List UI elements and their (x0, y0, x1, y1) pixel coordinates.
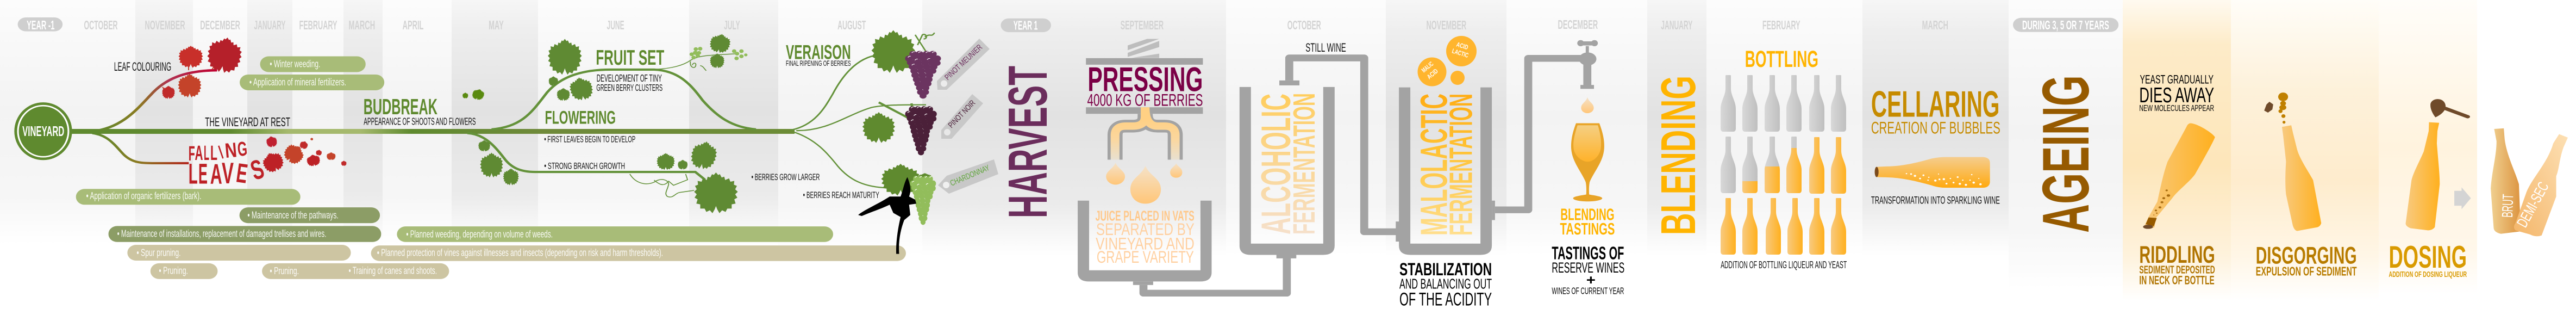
timeline: month labels, August and year 1: AUGUST (837, 18, 866, 32)
text: stabilization (1399, 260, 1492, 310)
panel: budbreak, flowering and fruit set: GREEN BERRY CLUSTERS (596, 83, 662, 94)
task: pruning and training: • Pruning. (270, 266, 299, 277)
timeline: month labels, blending: DECEMBER (1558, 18, 1598, 32)
text: veraison description: FINAL RIPENING OF BERRIES (786, 60, 851, 68)
panel: riddling, disgorging and dosing: SEDIMENT DEPOSITED (2139, 264, 2215, 276)
icon: fruit set vine with tiny berries (690, 33, 747, 68)
row three: full bottles (1721, 198, 1846, 255)
icon: pinot meunier leaf and cluster (872, 30, 941, 98)
panel: malolactic fermentation and blending tastings: WINES OF CURRENT YEAR (1552, 286, 1624, 297)
panel: riddling, disgorging and dosing: NEW MOLECULES APPEAR (2139, 103, 2214, 113)
panel: vineyard autumn: LEAF COLOURING (114, 60, 171, 73)
text: stabilization: OF THE ACIDITY (1399, 289, 1492, 310)
heading: falling leaves: L (204, 142, 209, 165)
text: tastings of reserve wines: RESERVE WINES (1552, 260, 1624, 276)
heading: dosing (2389, 239, 2467, 279)
heading: malolactic fermentation (1413, 94, 1479, 236)
text: THE VINEYARD AT REST (205, 115, 290, 129)
timeline: March and ageing duration: MARCH (1922, 18, 1948, 32)
text: fruit set description (596, 72, 662, 94)
label: still wine: STILL WINE (1305, 41, 1346, 54)
panel: riddling, disgorging and dosing: EXPULSION OF SEDIMENT (2256, 264, 2357, 279)
text: tastings of reserve wines: + (1586, 272, 1596, 287)
task: winter weeding (260, 56, 366, 72)
task: organic fertilizers (76, 189, 301, 205)
timeline: month labels, spring and summer: JUNE (607, 18, 624, 32)
task: winter weeding: • Winter weeding. (270, 58, 320, 70)
icon: brut bottle (2491, 128, 2521, 234)
icon: demi-sec bottle (2514, 134, 2568, 236)
icon: juice pipes (1115, 107, 1176, 159)
heading: disgorging (2256, 242, 2357, 279)
task: pathways: • Maintenance of the pathways. (247, 209, 339, 221)
text: TRANSFORMATION INTO SPARKLING WINE (1871, 194, 2000, 206)
text: 4000 kg of berries: 4000 KG OF BERRIES (1087, 91, 1203, 110)
icon: small bud leaves (462, 88, 486, 101)
icon: wine drop (1581, 97, 1594, 113)
heading: blending tastings (1560, 205, 1615, 238)
task: pruning and training (262, 263, 449, 279)
icon: press plates (1086, 58, 1203, 114)
text: juice placed in vats: SEPARATED BY (1096, 220, 1195, 239)
panel: vineyard autumn (14, 60, 290, 163)
pipe: vat one to vat two (1143, 258, 1287, 293)
icon: falling leaves (260, 135, 347, 175)
bubble: small (1450, 71, 1465, 85)
timeline: month labels, winemaking (1121, 18, 1321, 32)
icon: press screw (1128, 39, 1159, 58)
tag: chardonnay: CHARDONNAY (949, 163, 991, 188)
label: brut: BRUT (2499, 194, 2516, 218)
heading: blending tastings: TASTINGS (1560, 219, 1615, 238)
task: spur pruning (127, 245, 351, 261)
text: JULY (724, 18, 740, 32)
panel: riddling, disgorging and dosing: DOSING (2389, 239, 2467, 274)
timeline: month labels, spring and summer: MAY (489, 18, 504, 32)
task: installations: • Maintenance of installations, replacement of damaged trellises and wires. (117, 228, 326, 239)
vineyard task bars, summer (371, 226, 906, 261)
ageing duration pill (2013, 18, 2118, 32)
icon: red autumn leaves on branch (162, 35, 245, 99)
branch: pinot noir (796, 105, 926, 131)
timeline: month labels, blending: NOVEMBER (1427, 18, 1466, 32)
heading: alcoholic fermentation: FERMENTATION (1287, 93, 1322, 234)
main vine stem (72, 129, 795, 134)
text: berries bullets: • BERRIES GROW LARGER (752, 172, 820, 182)
task: planned protection: • Planned protection of vines against illnesses and insects (depending on risk and harm thresholds). (377, 247, 663, 258)
branch: chardonnay (794, 132, 889, 188)
text: berries bullets: • BERRIES REACH MATURITY (803, 190, 879, 200)
icon: riddling bottle (2143, 124, 2215, 229)
timeline: month labels, year -1: OCTOBER (84, 18, 118, 32)
icon: leaves lower left (478, 140, 519, 186)
icon: disgorging bottle (2264, 92, 2321, 231)
badge: vineyard: VINEYARD (22, 124, 64, 140)
heading: pressing: PRESSING (1087, 60, 1203, 98)
panel: pressing (1078, 39, 1399, 293)
text: flowering bullets (544, 134, 635, 171)
label: demi-sec: DEMI-SEC (2514, 179, 2552, 230)
text: ADDITION OF BOTTLING LIQUEUR AND YEAST (1721, 260, 1847, 270)
heading: falling leaves: I (216, 141, 226, 163)
tag: chardonnay (938, 159, 998, 194)
timeline: month labels, spring and summer (403, 18, 740, 32)
icon: arrow (2454, 187, 2471, 209)
branch: falling leaves (92, 133, 189, 163)
timeline: month labels, blending: JANUARY (1661, 18, 1692, 32)
pipe: still wine (1289, 58, 1399, 232)
text: OCTOBER (1287, 18, 1321, 32)
heading: blending tastings: BLENDING (1560, 205, 1615, 224)
heading: falling leaves: S (247, 153, 267, 186)
text: juice placed in vats: JUICE PLACED IN VATS (1096, 208, 1195, 224)
icon: pinot noir leaf and cluster (862, 102, 937, 155)
heading: falling leaves: N (224, 139, 238, 163)
year 1 pill (1001, 18, 1051, 33)
task: pruning and training: • Training of canes and shoots. (349, 265, 437, 276)
icon: vat one (1078, 201, 1211, 285)
text: juice placed in vats: VINEYARD AND (1096, 234, 1195, 254)
tag: pinot meunier (937, 39, 990, 90)
text: flowering bullets: • STRONG BRANCH GROWTH (544, 161, 625, 171)
heading: riddling (2139, 241, 2215, 287)
text: yeast gradually dies away (2139, 73, 2214, 113)
icon: leaves lower right (656, 140, 738, 213)
heading: falling leaves: F (189, 143, 195, 165)
bubble: lactic acid: LACTIC (1451, 47, 1470, 59)
icon: juice drops (1106, 163, 1182, 203)
text: tastings of reserve wines (1552, 243, 1624, 297)
icon: secateurs (858, 177, 916, 254)
text: MARCH (349, 18, 375, 32)
panel: riddling, disgorging and dosing: IN NECK OF BOTTLE (2139, 274, 2215, 287)
heading: falling leaves: L (189, 158, 198, 190)
timeline: month labels, year -1: NOVEMBER (145, 18, 185, 32)
task: pathways (240, 207, 380, 223)
bubble: malic acid (1417, 58, 1447, 86)
text: stabilization: STABILIZATION (1399, 260, 1492, 279)
heading: flowering: FLOWERING (545, 108, 616, 128)
tag: pinot noir: PINOT NOIR (947, 98, 977, 130)
text: stabilization: AND BALANCING OUT (1399, 276, 1492, 292)
timeline: month labels, year -1: DECEMBER (200, 18, 240, 32)
timeline: month labels, year -1: JANUARY (254, 18, 285, 32)
heading: alcoholic fermentation (1253, 93, 1322, 234)
text: creation of bubbles: CREATION OF BUBBLES (1871, 119, 2000, 138)
heading: veraison: VERAISON (786, 41, 851, 64)
icon: dosing bottle (2406, 122, 2440, 230)
icon: tasting glass (1571, 124, 1604, 201)
icon: dosing spoon (2430, 99, 2468, 118)
text: tastings of reserve wines: TASTINGS OF (1552, 243, 1624, 263)
bubble: malic acid: ACID (1425, 67, 1440, 81)
chart: bottle grid filling up (1721, 75, 1846, 255)
pipe: vat three to tap (1495, 58, 1583, 210)
text: juice placed in vats: GRAPE VARIETY (1097, 248, 1194, 267)
icon: tap (1577, 40, 1598, 89)
bubble: lactic acid: ACID (1455, 40, 1469, 51)
row two: filling bottles (1721, 137, 1846, 194)
year 1 pill: YEAR 1 (1014, 19, 1037, 33)
task: planned weeding (397, 226, 833, 242)
text: juice placed in vats (1096, 208, 1195, 267)
task: spur pruning: • Spur pruning. (136, 247, 181, 258)
text: FEBRUARY (1762, 18, 1800, 32)
heading: falling leaves: V (222, 156, 234, 190)
icon: fruit set leaves (548, 39, 595, 102)
heading: falling leaves (189, 138, 267, 190)
panel: riddling, disgorging and dosing: YEAST GRADUALLY (2140, 73, 2214, 86)
panel: budbreak, flowering and fruit set: DEVELOPMENT OF TINY (597, 72, 662, 84)
panel: cellaring (1871, 83, 2000, 206)
tag: pinot meunier: PINOT MEUNIER (943, 42, 984, 82)
tendril: fruit set (656, 54, 739, 71)
row one: empty bottles (1721, 75, 1846, 132)
heading: falling leaves: L (210, 142, 217, 165)
panel: budbreak, flowering and fruit set (364, 33, 756, 213)
heading: falling leaves: E (198, 158, 208, 190)
icon: chardonnay leaf and cluster (881, 164, 936, 225)
year -1 pill (18, 17, 62, 32)
heading: falling leaves: A (195, 142, 203, 165)
task: mineral fertilizers: • Application of mineral fertilizers. (249, 77, 346, 88)
heading: falling leaves: G (236, 138, 248, 160)
icon: bottle on its side (1875, 157, 1990, 188)
panel: riddling, disgorging and dosing: ADDITION OF DOSING LIQUEUR (2389, 270, 2467, 279)
icon: vat three (1396, 88, 1495, 255)
year -1 pill: YEAR -1 (27, 18, 54, 32)
branch: leaf colouring (92, 70, 217, 132)
task: planned weeding: • Planned weeding, depending on volume of weeds. (406, 229, 553, 240)
timeline: March and ageing duration (1922, 18, 2118, 32)
task: mineral fertilizers (240, 75, 384, 90)
branch: flowering low (467, 133, 705, 180)
icon: vat two (1240, 81, 1335, 258)
heading: fruit set: FRUIT SET (596, 46, 664, 70)
text: berries bullets (752, 172, 879, 200)
panel: budbreak, flowering and fruit set: • FIRST LEAVES BEGIN TO DEVELOP (544, 134, 635, 144)
ageing duration pill: DURING 3, 5 OR 7 YEARS (2022, 18, 2109, 32)
panel: riddling, disgorging and dosing: RIDDLING (2139, 241, 2215, 268)
timeline: month labels, spring and summer: APRIL (403, 18, 423, 32)
heading: falling leaves: A (210, 158, 222, 190)
heading: bottling: BOTTLING (1745, 46, 1818, 72)
timeline: month labels, blending (1427, 18, 1800, 32)
tendril: flowering (630, 174, 694, 197)
branch: fruit set arc (491, 70, 756, 129)
branch: pinot meunier (791, 55, 879, 130)
timeline: month labels, August and year 1 (837, 18, 1051, 33)
vineyard maintenance task bars, autumn to spring (76, 56, 449, 279)
panel: veraison and grape varieties (752, 30, 941, 254)
task: installations (109, 226, 381, 242)
timeline: month labels, winemaking: SEPTEMBER (1121, 18, 1164, 32)
task: pruning, autumn: • Pruning. (159, 265, 188, 276)
timeline: month labels, year -1: FEBRUARY (299, 18, 337, 32)
timeline: month labels, year -1 (18, 17, 375, 32)
tag: pinot noir (941, 94, 983, 139)
panel: riddling, disgorging and dosing: DIES AWAY (2139, 83, 2214, 107)
heading: cellaring: CELLARING (1871, 83, 1999, 125)
bubble: lactic acid (1446, 36, 1477, 66)
bubble: malic acid: MALIC (1420, 60, 1435, 74)
badge: vineyard (14, 102, 72, 160)
panel: riddling, disgorging and dosing: DISGORGING (2256, 242, 2357, 269)
task: organic fertilizers: • Application of organic fertilizers (bark). (86, 190, 202, 202)
heading: falling leaves: E (234, 157, 249, 189)
panel: malolactic fermentation and blending tastings (1396, 40, 1847, 310)
panel: budbreak, flowering and fruit set: APPEARANCE OF SHOOTS AND FLOWERS (364, 116, 476, 127)
task: pruning, autumn (151, 263, 217, 279)
panel: riddling, disgorging and dosing (2139, 73, 2568, 287)
panel: budbreak, flowering and fruit set: BUDBREAK (364, 95, 437, 119)
